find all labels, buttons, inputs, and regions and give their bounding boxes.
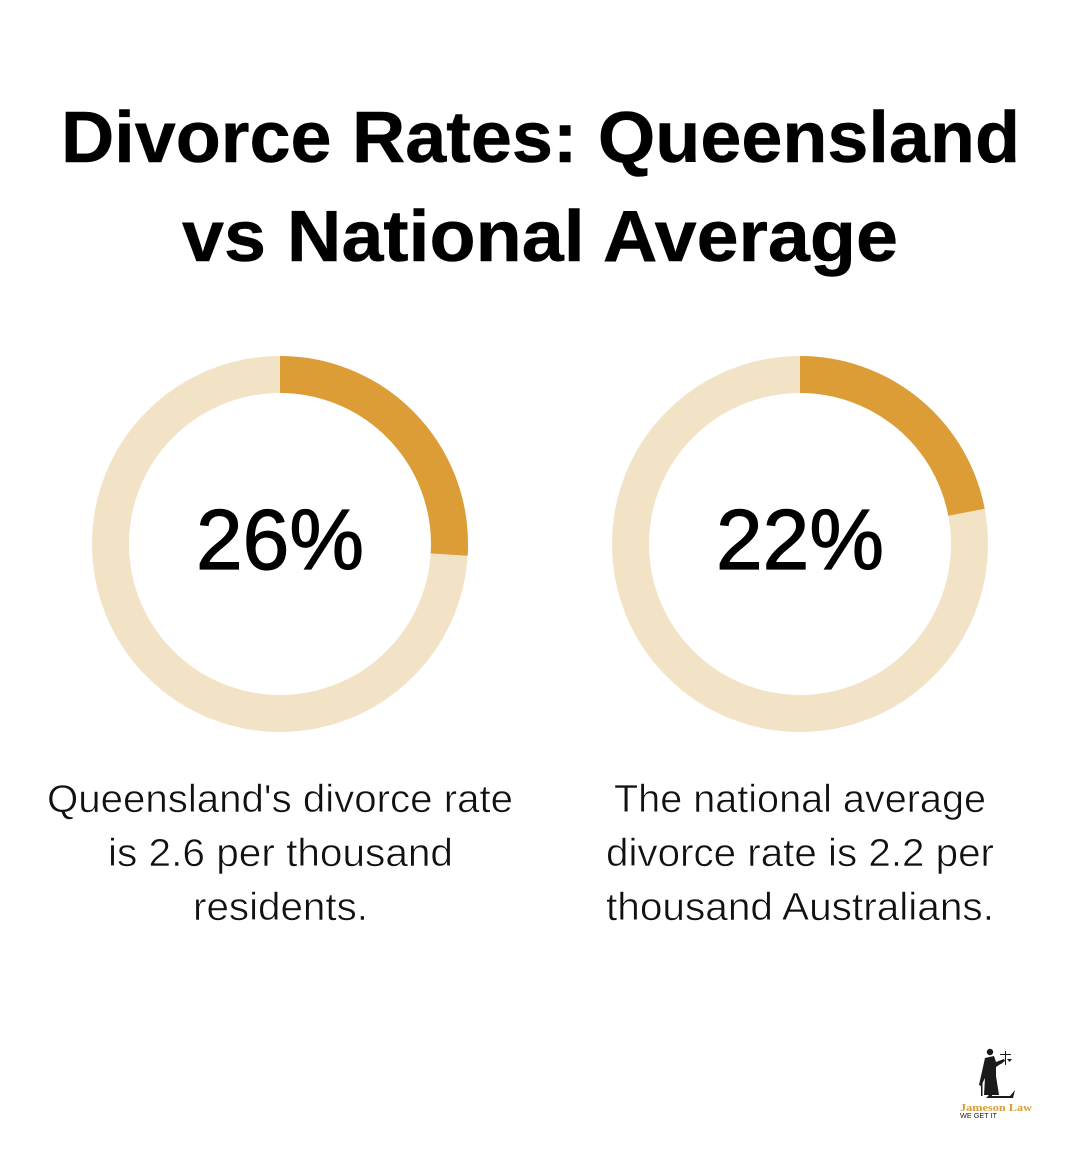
- value: 22%: 22%: [716, 493, 884, 588]
- title: Divorce Rates: Queensland: [61, 98, 1020, 178]
- title: [61, 98, 1020, 277]
- text: Queensland description: residents.: [193, 886, 368, 929]
- text: national description: [606, 778, 994, 929]
- donut chart: 26%: [110, 374, 450, 714]
- logo tagline: WE GET IT: [960, 1113, 998, 1120]
- text: Queensland description: is 2.6 per thousand: [108, 832, 453, 875]
- logo name: Jameson Law: [960, 1102, 1032, 1114]
- donut chart: 22%: [630, 374, 970, 714]
- icon: lady justice with L: [979, 1049, 1015, 1098]
- text: Queensland description: [47, 778, 513, 929]
- logo: Jameson Law: [960, 1049, 1032, 1120]
- text: national description: divorce rate is 2.2 per: [606, 832, 994, 875]
- title: vs National Average: [182, 197, 898, 277]
- text: national description: thousand Australians.: [606, 886, 994, 929]
- text: national description: The national average: [614, 778, 986, 821]
- panel: National average: [606, 374, 994, 929]
- text: Queensland description: Queensland's divorce rate: [47, 778, 513, 821]
- panel: Queensland: [47, 374, 513, 929]
- value: 26%: 26%: [196, 493, 364, 588]
